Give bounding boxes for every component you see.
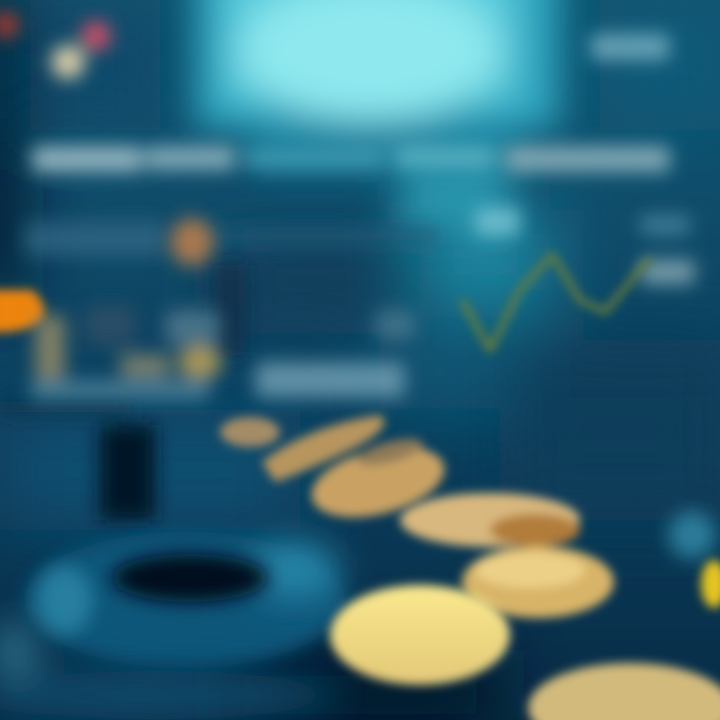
coin stack right [400, 493, 614, 618]
orange accent [170, 218, 214, 266]
ring left highlight [37, 566, 93, 634]
ring right highlight [250, 542, 340, 598]
dark vertical figure [0, 265, 245, 520]
coin stack upper [220, 415, 452, 530]
top-right label [590, 34, 670, 60]
ring hole [112, 554, 268, 602]
ring body [25, 532, 345, 668]
subtitle lines [25, 208, 695, 284]
bottom right coin [528, 663, 720, 720]
title band [32, 146, 670, 172]
top-left pill icon [0, 12, 111, 79]
lower ring shadow [0, 620, 340, 719]
dark ring [25, 532, 345, 668]
middle data row [30, 305, 415, 400]
line chart [462, 255, 650, 350]
top cyan light glow [195, 0, 560, 235]
large coin [330, 585, 510, 685]
right side round icon [668, 511, 716, 559]
orange tag [0, 290, 44, 332]
yellow dot [701, 560, 720, 608]
